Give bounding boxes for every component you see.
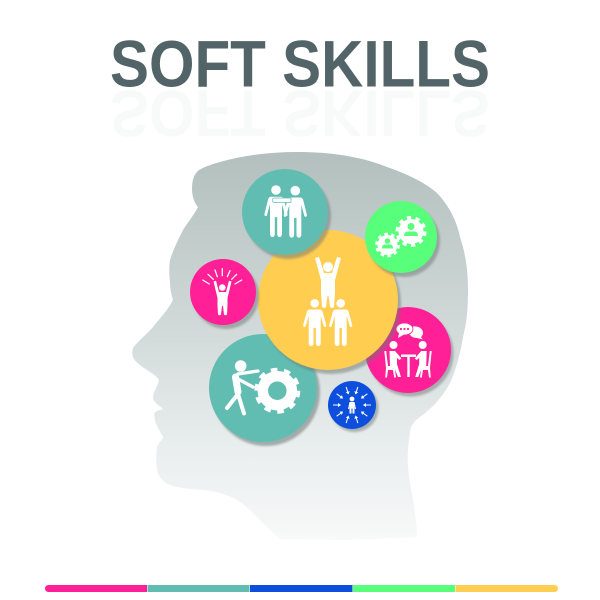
icon: small gear with person xyxy=(377,234,398,256)
circle: teamwork pyramid xyxy=(258,230,401,374)
circle: meeting xyxy=(365,307,454,396)
icon: people pyramid xyxy=(303,257,352,346)
icon: cheering person xyxy=(203,269,242,315)
icon: person with arrows pointing in xyxy=(333,386,371,424)
icon: gear xyxy=(257,371,297,411)
circle: gears with people xyxy=(365,201,440,277)
icon: speech bubbles xyxy=(396,323,423,340)
head silhouette xyxy=(132,152,468,540)
icon: two people with arm on shoulder xyxy=(264,185,307,238)
circle: focus person xyxy=(328,381,378,432)
colour bar xyxy=(45,585,558,592)
icon: two people at table xyxy=(384,341,432,378)
circle: supporting colleague xyxy=(242,169,331,259)
title: SOFT SKILLS xyxy=(110,26,490,100)
circle: cheering person xyxy=(190,259,259,329)
circle: pushing gear xyxy=(209,334,320,446)
icon: large gear with person xyxy=(398,218,424,245)
icon: person pushing xyxy=(227,360,258,414)
title reflection: SOFT SKILLS xyxy=(110,76,490,150)
